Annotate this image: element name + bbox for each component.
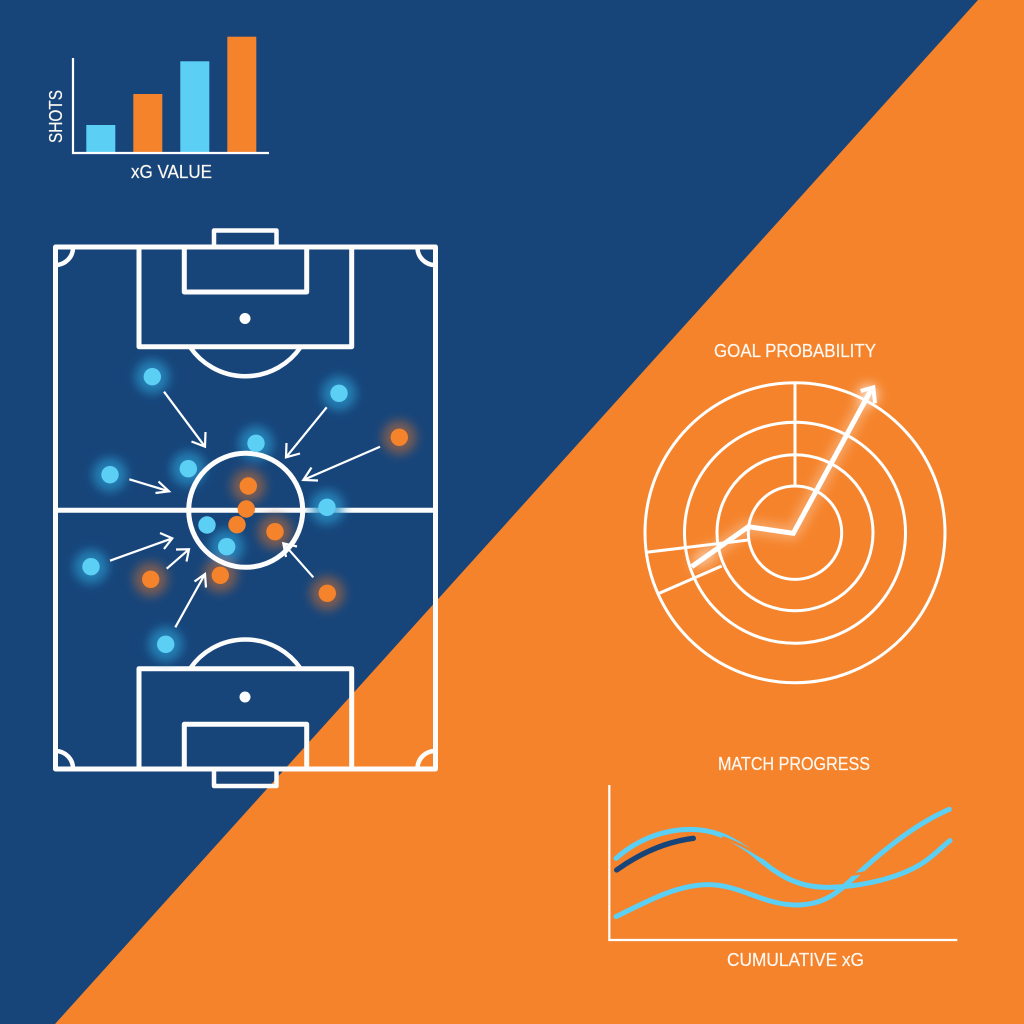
halfway line [56, 508, 436, 513]
shot arrows [110, 392, 380, 627]
bottom six-yard box [184, 724, 307, 769]
line chart: match progress [609, 754, 957, 970]
bar 4 [227, 37, 256, 153]
y-axis label: SHOTS [46, 90, 66, 143]
bottom goal [214, 769, 276, 786]
line chart heading: MATCH PROGRESS [718, 754, 870, 774]
orange overlay line [723, 828, 955, 876]
polar chart: goal probability [645, 341, 945, 683]
orange shot dots [142, 429, 408, 602]
top goal [214, 230, 276, 247]
x-axis label: CUMULATIVE xG [727, 950, 864, 970]
bar chart: shots by xG value [46, 37, 269, 182]
line chart axes [609, 785, 957, 940]
trend glow [692, 385, 878, 567]
top penalty arc [190, 347, 301, 376]
x-axis label: xG VALUE [131, 162, 212, 182]
top six-yard box [184, 247, 307, 292]
centre circle [189, 453, 303, 567]
bar 1 [86, 125, 115, 152]
rings and spokes [645, 383, 945, 683]
data lines [616, 809, 955, 917]
lower blue line [616, 809, 949, 917]
trend arrow [692, 387, 875, 567]
corner arcs [56, 247, 436, 769]
dark navy line [617, 838, 693, 870]
penalty spots [240, 313, 250, 702]
upper blue line [616, 829, 950, 887]
football pitch [56, 230, 436, 786]
bar 3 [180, 61, 209, 152]
polar chart heading: GOAL PROBABILITY [714, 341, 876, 361]
bar 2 [133, 94, 162, 152]
shot dots [82, 368, 408, 653]
top penalty box [139, 247, 352, 347]
bottom penalty box [139, 669, 352, 769]
shot dot glows [74, 360, 416, 661]
chart axes [73, 58, 269, 153]
pitch outline [56, 247, 436, 769]
blue shot dots [82, 368, 348, 653]
bottom penalty arc [190, 639, 301, 669]
